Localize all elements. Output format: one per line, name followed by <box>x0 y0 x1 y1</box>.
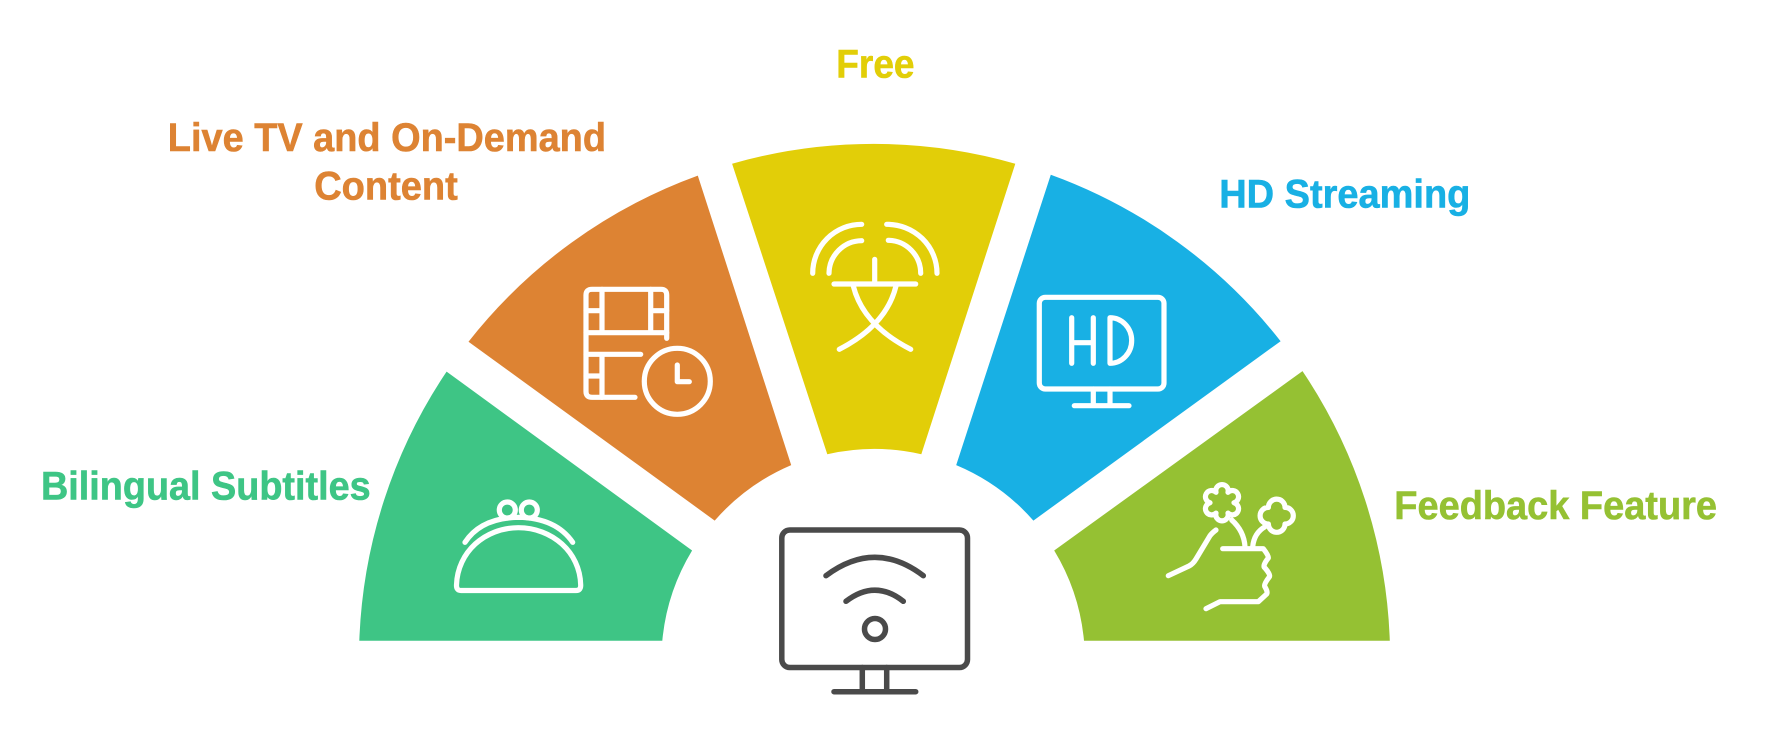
heading: Free: Free <box>836 42 914 86</box>
heading: Live TV and On-Demand Content: Live TV and On-Demand <box>168 116 606 160</box>
heading: Bilingual Subtitles: Bilingual Subtitles <box>41 464 371 508</box>
icon: purse <box>456 502 581 590</box>
panel: Bilingual Subtitles segment <box>359 372 692 641</box>
icon: central monitor with wifi signal <box>782 530 968 692</box>
heading: Live TV and On-Demand Content: Content <box>314 164 458 208</box>
icon: film strip with clock <box>586 289 710 414</box>
heading: Feedback Feature: Feedback Feature <box>1394 484 1717 528</box>
heading: Live TV and On-Demand Content <box>168 116 606 208</box>
heading: HD Streaming: HD Streaming <box>1219 172 1470 216</box>
icon: HD monitor <box>1039 297 1164 406</box>
panel: Free segment <box>732 144 1015 454</box>
icon: hand holding flowers <box>1168 485 1293 609</box>
icon: translation signal <box>813 224 937 349</box>
panel: Feedback Feature segment <box>1054 371 1390 641</box>
panel: HD Streaming segment <box>956 175 1281 521</box>
panel: Live TV and On-Demand Content segment <box>468 176 791 521</box>
